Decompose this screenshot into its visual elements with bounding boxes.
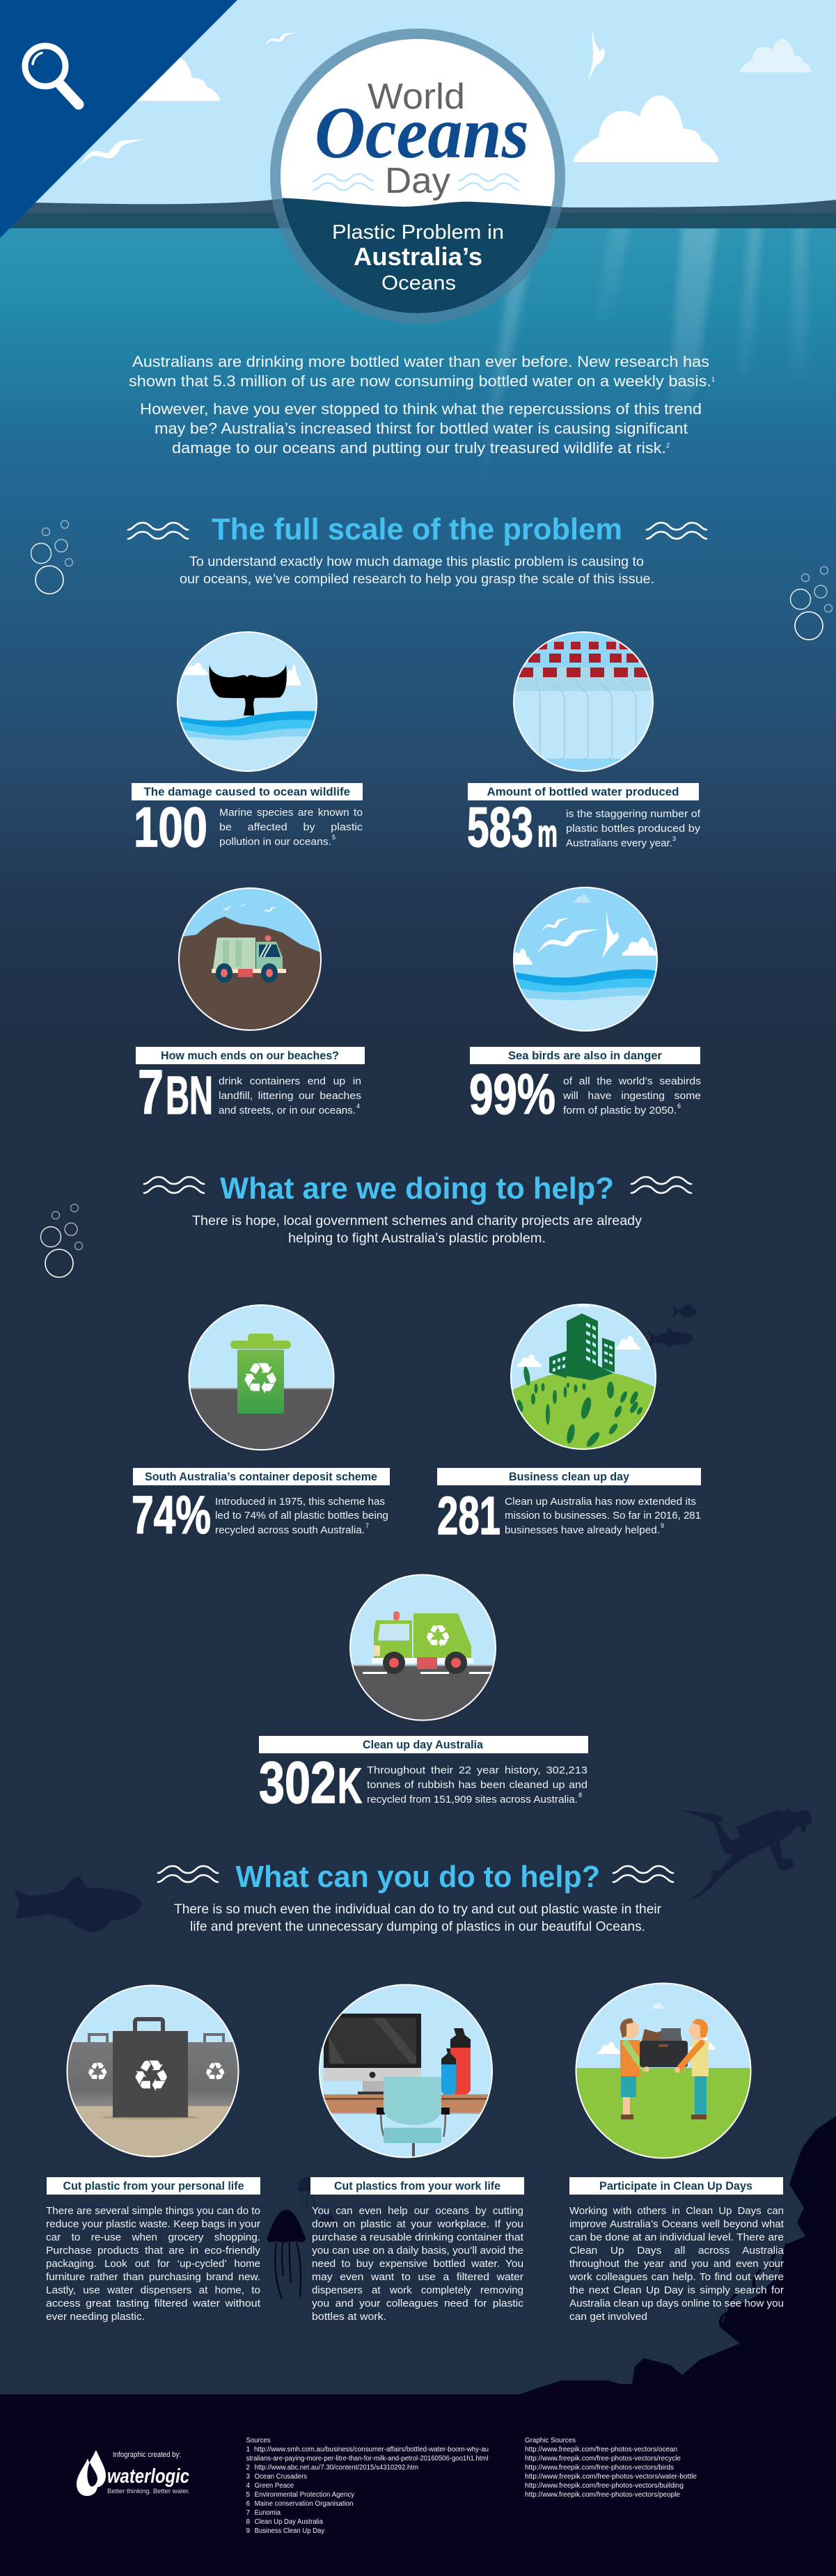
body text: clean up days: Australia clean up days online to see how you xyxy=(569,2298,784,2309)
panel: work life xyxy=(310,1985,524,2323)
stat text: 583m xyxy=(566,808,701,849)
sources list: Environmental Protection Agency xyxy=(255,2491,354,2499)
body text: personal life: reduce your plastic waste. Keep bags in your xyxy=(46,2218,260,2230)
sources list: Sources xyxy=(246,2437,270,2444)
stat text: 74%: recycled across south Australia. xyxy=(215,1524,365,1536)
icon: people carrying rubbish box xyxy=(574,1984,755,2162)
stat text: 7BN: and streets, or in our oceans. xyxy=(219,1105,356,1116)
logo: waterlogic xyxy=(77,2450,190,2496)
stat: 583m: 583 xyxy=(467,796,533,859)
sources list: 8 xyxy=(246,2518,251,2526)
sources list: Maine conservation Organisation xyxy=(255,2500,354,2508)
label: sea birds: Sea birds are also in danger xyxy=(508,1049,662,1062)
stat text: 100: be affected by plastic xyxy=(219,821,363,833)
panel: bottled water produced xyxy=(467,626,701,859)
body text: work life: you and your colleagues need for plastic xyxy=(312,2298,524,2309)
subtitle: Plastic Problem in xyxy=(332,221,504,244)
body text: work life: bottles at work. xyxy=(312,2311,386,2323)
sources list: 6 xyxy=(246,2500,251,2508)
icon: recycling bin: ♻ xyxy=(241,1353,280,1404)
clouds xyxy=(104,39,812,162)
body text: work life: down on plastic at your workplace. If you xyxy=(312,2218,523,2230)
sources list: http://www.abc.net.au/7.30/content/2015/s4310292.htm xyxy=(255,2464,418,2472)
sources list: 9 xyxy=(246,2527,251,2535)
bubbles mid left xyxy=(40,1204,82,1277)
body text: clean up days: improve Australia’s Oceans well beyond what xyxy=(569,2218,784,2230)
stat text: 99%: of all the world’s seabirds xyxy=(563,1075,701,1087)
intro text: However, have you ever stopped to think what the repercussions of this trend xyxy=(140,400,702,418)
created by: Infographic created by: xyxy=(113,2451,181,2459)
stat: 7BN: 7 xyxy=(138,1058,164,1128)
body text: clean up days: Working with others in Clean Up Days can xyxy=(569,2205,784,2217)
body text: clean up days: the next Clean Up Day is simply search for xyxy=(569,2284,784,2296)
label: personal life: Cut plastic from your personal life xyxy=(63,2179,244,2192)
stat text: 100 xyxy=(219,807,363,848)
stat text: 281: Clean up Australia has now extended its xyxy=(505,1496,696,1508)
stat: 7BN: BN xyxy=(166,1066,213,1125)
body text: clean up days: can get involved xyxy=(569,2311,647,2323)
sources list: 3 xyxy=(246,2473,251,2481)
sources list: Clean Up Day Australia xyxy=(255,2518,324,2526)
section intro: the full scale: our oceans, we’ve compiled research to help you grasp the scale of this issue. xyxy=(180,572,654,587)
subtitle: Australia’s xyxy=(354,242,482,271)
body text: personal life: access great tasting filtered water without xyxy=(46,2298,261,2309)
icon: whale tail xyxy=(174,632,320,773)
icon: recycling bags: ♻ xyxy=(204,2058,226,2087)
graphic sources list: http://www.freepik.com/free-photos-vectors/water-bottle xyxy=(525,2473,697,2481)
stat text: 7BN: landfill, littering our beaches xyxy=(219,1090,361,1102)
stat text: 281 xyxy=(505,1496,701,1536)
stat: 302K: 302 xyxy=(259,1750,336,1815)
horizon water band xyxy=(0,199,836,228)
sources list: Eunomia xyxy=(255,2509,281,2517)
silhouette: small fish xyxy=(647,1304,697,1348)
sources list: 4 xyxy=(246,2482,251,2490)
section heading: what are we doing to help: What are we doing to help? xyxy=(220,1171,614,1206)
stat text: 99%: form of plastic by 2050. xyxy=(563,1105,677,1116)
icon: recycling bags xyxy=(63,1985,244,2162)
sources list: Ocean Crusaders xyxy=(255,2473,307,2481)
title: Oceans: Oceans xyxy=(315,92,529,173)
wordmark: waterlogic xyxy=(107,2465,189,2488)
intro text: 2 xyxy=(666,442,670,449)
stat text: 74% xyxy=(215,1496,388,1536)
bubbles right xyxy=(791,567,833,640)
section intro: what are we doing: There is hope, local government schemes and charity projects are already xyxy=(192,1214,642,1228)
body text: work life: may even want to use a filtered water xyxy=(312,2271,523,2283)
title: World: World xyxy=(368,77,465,117)
label: how much ends on beaches: How much ends on our beaches? xyxy=(161,1049,339,1062)
body text: personal life: car to re-use when grocery shopping. xyxy=(46,2231,260,2243)
logo droplets xyxy=(77,2450,106,2496)
sources list: 1 xyxy=(246,2446,251,2453)
graphic sources list: http://www.freepik.com/free-photos-vectors/ocean xyxy=(525,2446,677,2453)
birds xyxy=(80,29,605,166)
label: container deposit: South Australia’s container deposit scheme xyxy=(145,1470,377,1483)
wave ornaments beside Day xyxy=(313,174,519,190)
graphic sources list: http://www.freepik.com/free-photos-vectors/people xyxy=(525,2491,680,2499)
footer background xyxy=(0,2394,836,2576)
icon: plastic bottles xyxy=(513,631,654,772)
stat text: 583m: is the staggering number of xyxy=(566,808,701,820)
section intro: what can you do: There is so much even the individual can do to try and cut out plastic waste in their xyxy=(174,1902,662,1917)
body text: personal life: Lastly, use water dispensers at home, to xyxy=(46,2284,260,2296)
label: the damage caused: The damage caused to ocean wildlife xyxy=(143,785,350,798)
label: amount of bottled water: Amount of bottled water produced xyxy=(487,785,679,798)
section intro: what are we doing xyxy=(192,1214,642,1246)
stat: 100: 100 xyxy=(134,796,207,859)
stat text: 281: 9 xyxy=(661,1522,664,1529)
icon: recycling truck xyxy=(348,1574,498,1728)
intro text: may be? Australia’s increased thirst for bottled water is causing significant xyxy=(155,420,688,437)
light rays in the water xyxy=(487,228,809,445)
body text: personal life: furniture rather than purchasing brand new. xyxy=(46,2271,260,2283)
body text: personal life: Purchase products that are in eco-friendly xyxy=(46,2245,261,2257)
body text: personal life: ever needing plastic. xyxy=(46,2311,145,2323)
stat text: 583m: 3 xyxy=(672,835,676,842)
panel: personal life xyxy=(46,1985,261,2323)
stat: 302K: K xyxy=(338,1759,362,1814)
icon: recycling bin xyxy=(188,1305,336,1455)
body text: clean up days: throughout the year and you and even your xyxy=(569,2258,784,2270)
stat text: 74%: Introduced in 1975, this scheme has xyxy=(215,1496,385,1508)
section intro: what can you do xyxy=(174,1902,662,1934)
silhouette: scuba diver xyxy=(680,1808,812,1902)
stat text: 302K: 8 xyxy=(578,1792,582,1799)
graphic sources list: http://www.freepik.com/free-photos-vectors/recycle xyxy=(525,2455,681,2463)
label: amount of bottled water xyxy=(468,783,699,800)
stat text: 7BN: 4 xyxy=(356,1103,360,1109)
icon: recycling bags: ♻ xyxy=(86,2058,109,2087)
subtitle: Oceans xyxy=(381,272,456,294)
sources list: 2 xyxy=(246,2464,251,2472)
intro text: Australians are drinking more bottled water than ever before. New research has xyxy=(132,353,709,370)
label: the damage caused xyxy=(132,783,363,800)
sources list: http://www.smh.com.au/business/consumer-affairs/bottled-water-boom-why-au xyxy=(254,2446,489,2453)
silhouette: jellyfish xyxy=(267,2177,337,2299)
stat text: 74%: 7 xyxy=(365,1522,369,1529)
sources list: stralians-are-paying-more-per-litre-than-for-milk-and-petrol-20160506-goo1h1.html xyxy=(246,2455,489,2463)
stat: 74%: 74% xyxy=(132,1485,211,1545)
tagline: Better thinking. Better water. xyxy=(107,2488,190,2495)
stat text: 281: businesses have already helped. xyxy=(505,1524,660,1536)
body text: clean up days: work colleagues can help. To find out where xyxy=(569,2271,784,2283)
stat text: 7BN: drink containers end up in xyxy=(219,1075,361,1087)
label: clean up days xyxy=(569,2177,783,2195)
subtitle xyxy=(332,221,504,294)
section heading: what can you do to help: What can you do to help? xyxy=(235,1860,600,1894)
panel: container deposit scheme xyxy=(132,1305,390,1545)
section heading: the full scale of the problem: The full scale of the problem xyxy=(212,512,622,546)
label: personal life xyxy=(47,2177,260,2195)
panel: clean up day Australia xyxy=(259,1574,588,1815)
silhouette: coral xyxy=(517,2116,836,2395)
blue corner banner xyxy=(0,0,237,238)
icon: green building xyxy=(508,1303,658,1455)
panel: clean up days xyxy=(569,1984,784,2323)
body text: personal life: packaging. Look out for ‘up-cycled’ home xyxy=(46,2258,260,2270)
stat text: 100: Marine species are known to xyxy=(219,807,363,819)
panel: business clean up day xyxy=(437,1303,701,1546)
panel: ocean wildlife xyxy=(132,632,363,859)
stat text: 7BN xyxy=(219,1075,361,1116)
graphic sources list: http://www.freepik.com/free-photos-vectors/building xyxy=(525,2482,684,2490)
stat: 7BN xyxy=(138,1058,213,1128)
sources list: 7 xyxy=(246,2509,251,2517)
bubbles left xyxy=(31,521,72,594)
silhouette: large fish xyxy=(15,1876,141,1932)
graphic sources list: http://www.freepik.com/free-photos-vectors/birds xyxy=(525,2464,674,2472)
stat text: 100: 5 xyxy=(332,834,336,841)
intro text: 1 xyxy=(711,376,715,383)
stat text: 99%: 6 xyxy=(677,1103,681,1109)
intro text: shown that 5.3 million of us are now consuming bottled water on a weekly basis. xyxy=(129,372,711,390)
body text: clean up days xyxy=(569,2205,784,2323)
label: clean up days: Participate in Clean Up Days xyxy=(599,2179,752,2192)
label: clean up day: Clean up day Australia xyxy=(363,1738,484,1751)
icon: recycling bags: ♻ xyxy=(132,2050,171,2101)
icon: recycling truck: ♻ xyxy=(424,1619,452,1654)
body text: personal life: There are several simple things you can do to xyxy=(46,2205,260,2217)
stat text: 302K: Throughout their 22 year history, 302,213 xyxy=(367,1764,587,1776)
label: business clean up xyxy=(437,1468,701,1485)
intro text: damage to our oceans and putting our truly treasured wildlife at risk. xyxy=(172,439,666,457)
stat: 281: 281 xyxy=(437,1486,500,1546)
stat text: 302K xyxy=(367,1764,587,1805)
label: work life xyxy=(310,2177,524,2195)
stat text: 99%: will have ingesting some xyxy=(562,1090,701,1102)
stat text: 74%: led to 74% of all plastic bottles being xyxy=(215,1510,388,1522)
stat: 583m: m xyxy=(537,812,558,855)
icon: birds over the sea xyxy=(508,887,661,1037)
stat text: 302K: tonnes of rubbish has been cleaned up and xyxy=(367,1779,587,1791)
panel: beaches xyxy=(136,888,365,1128)
label: clean up day xyxy=(259,1736,588,1753)
body text: work life: dispensers at work completely removing xyxy=(312,2284,523,2296)
body text: work life: you can use on a daily basis, you’ll avoid the xyxy=(312,2245,523,2257)
section intro: the full scale xyxy=(180,555,654,587)
stat text: 583m: Australians every year. xyxy=(566,837,672,849)
stat text: 281: mission to businesses. So far in 2016, 281 xyxy=(505,1510,701,1522)
section intro: what are we doing: helping to fight Australia’s plastic problem. xyxy=(288,1231,546,1246)
graphic sources list: Graphic Sources xyxy=(525,2437,576,2444)
body text: work life: You can even help our oceans by cutting xyxy=(312,2205,523,2217)
label: sea birds xyxy=(470,1047,700,1064)
icon: desk with monitor and bottles xyxy=(313,1985,501,2160)
label: work life: Cut plastics from your work life xyxy=(334,2179,500,2192)
section intro: the full scale: To understand exactly how much damage this plastic problem is causing to xyxy=(189,555,644,569)
sources list: Business Clean Up Day xyxy=(255,2527,324,2535)
body text: personal life xyxy=(46,2205,261,2323)
sources list xyxy=(246,2437,489,2535)
icon: rubbish truck on landfill xyxy=(174,888,327,1037)
graphic sources list xyxy=(525,2437,697,2499)
title: Day: Day xyxy=(385,161,450,201)
title badge xyxy=(270,29,565,327)
icon: magnifying glass xyxy=(25,46,79,104)
body text: clean up days: can be done at an individual level. There are xyxy=(569,2231,784,2243)
body text: work life: need to buy expensive bottled water. You xyxy=(312,2258,523,2270)
body text: work life xyxy=(312,2205,524,2323)
intro text xyxy=(129,353,715,457)
panel: sea birds xyxy=(469,887,701,1126)
label: business clean up: Business clean up day xyxy=(509,1470,630,1483)
body text: work life: purchase a reusable drinking container that xyxy=(312,2231,524,2243)
stat text: 100: pollution in our oceans. xyxy=(219,836,331,848)
stat text: 99% xyxy=(562,1075,701,1116)
label: how much ends on beaches xyxy=(136,1047,365,1064)
sources list: 5 xyxy=(246,2491,251,2499)
section intro: what can you do: life and prevent the unnecessary dumping of plastics in our beautiful Oceans. xyxy=(190,1920,645,1934)
stat text: 583m: plastic bottles produced by xyxy=(566,823,701,835)
stat: 99%: 99% xyxy=(469,1063,555,1126)
stat text: 302K: recycled from 151,909 sites across Australia. xyxy=(367,1794,578,1805)
sources list: Green Peace xyxy=(255,2482,294,2490)
body text: clean up days: Clean Up Days all across Australia xyxy=(569,2245,784,2257)
